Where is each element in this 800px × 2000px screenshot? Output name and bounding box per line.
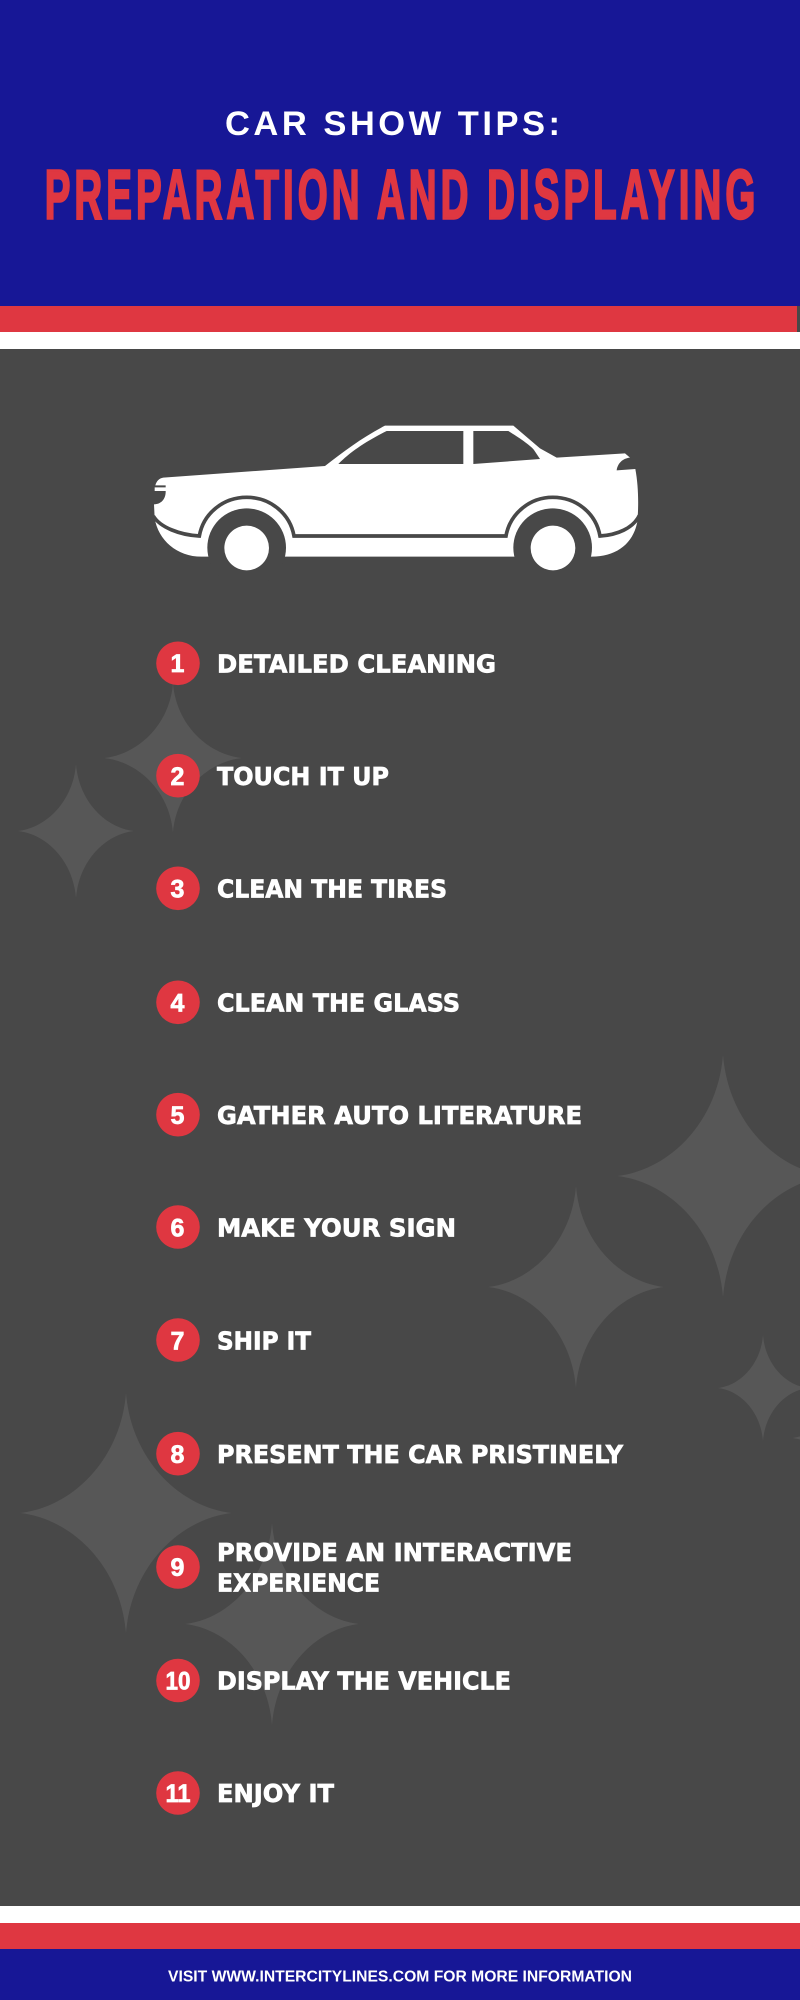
header panel [0,0,800,306]
list item 11: ENJOY IT [217,1779,334,1808]
list item 10 [156,1659,511,1702]
list item 3: 3 [171,876,184,904]
header title: preparation and displaying: PREPARATION AND DISPLAYING [45,156,755,234]
list item 4: CLEAN THE GLASS [217,988,460,1018]
list item 11 [156,1771,334,1815]
list item 10: DISPLAY THE VEHICLE [217,1666,511,1696]
list item 1: DETAILED CLEANING [217,649,496,678]
footer panel [0,1949,800,2000]
list item 5: 5 [171,1102,185,1130]
list item 11: 11 [166,1780,191,1808]
list item 10: 10 [166,1668,190,1696]
list item 7: 7 [171,1328,184,1356]
list item 8 [156,1432,623,1475]
list item 9 [156,1538,572,1598]
list item 9: 9 [171,1554,184,1582]
top white stripe [0,332,800,349]
list item 4 [156,980,460,1024]
list item 5: GATHER AUTO LITERATURE [217,1101,582,1130]
list item 6: MAKE YOUR SIGN [217,1214,456,1242]
header title: car show tips: CAR SHOW TIPS: [225,105,560,143]
list item 2: 2 [171,763,184,791]
list item 8: 8 [171,1441,185,1469]
list item 5 [156,1093,582,1136]
bottom red stripe [0,1923,800,1949]
list item 1 [156,642,496,685]
list item 3: CLEAN THE TIRES [217,874,447,904]
list item 6 [156,1205,456,1249]
list item 9: EXPERIENCE [217,1568,380,1598]
icon: car silhouette [153,426,639,587]
list item 7 [156,1318,311,1362]
list item 8: PRESENT THE CAR PRISTINELY [217,1440,623,1469]
list item 4: 4 [171,990,185,1018]
list item 3 [156,866,447,910]
list item 9: PROVIDE AN INTERACTIVE [217,1538,572,1567]
top red stripe [0,306,797,332]
list item 1: 1 [171,650,185,678]
list item 2: TOUCH IT UP [217,762,389,791]
list item 2 [156,754,389,798]
bottom white stripe [0,1906,800,1923]
list item 7: SHIP IT [217,1326,311,1356]
list item 6: 6 [171,1214,184,1242]
footer text: VISIT WWW.INTERCITYLINES.COM FOR MORE INFORMATION [168,1968,632,1986]
decorative sparkles [18,684,800,1725]
